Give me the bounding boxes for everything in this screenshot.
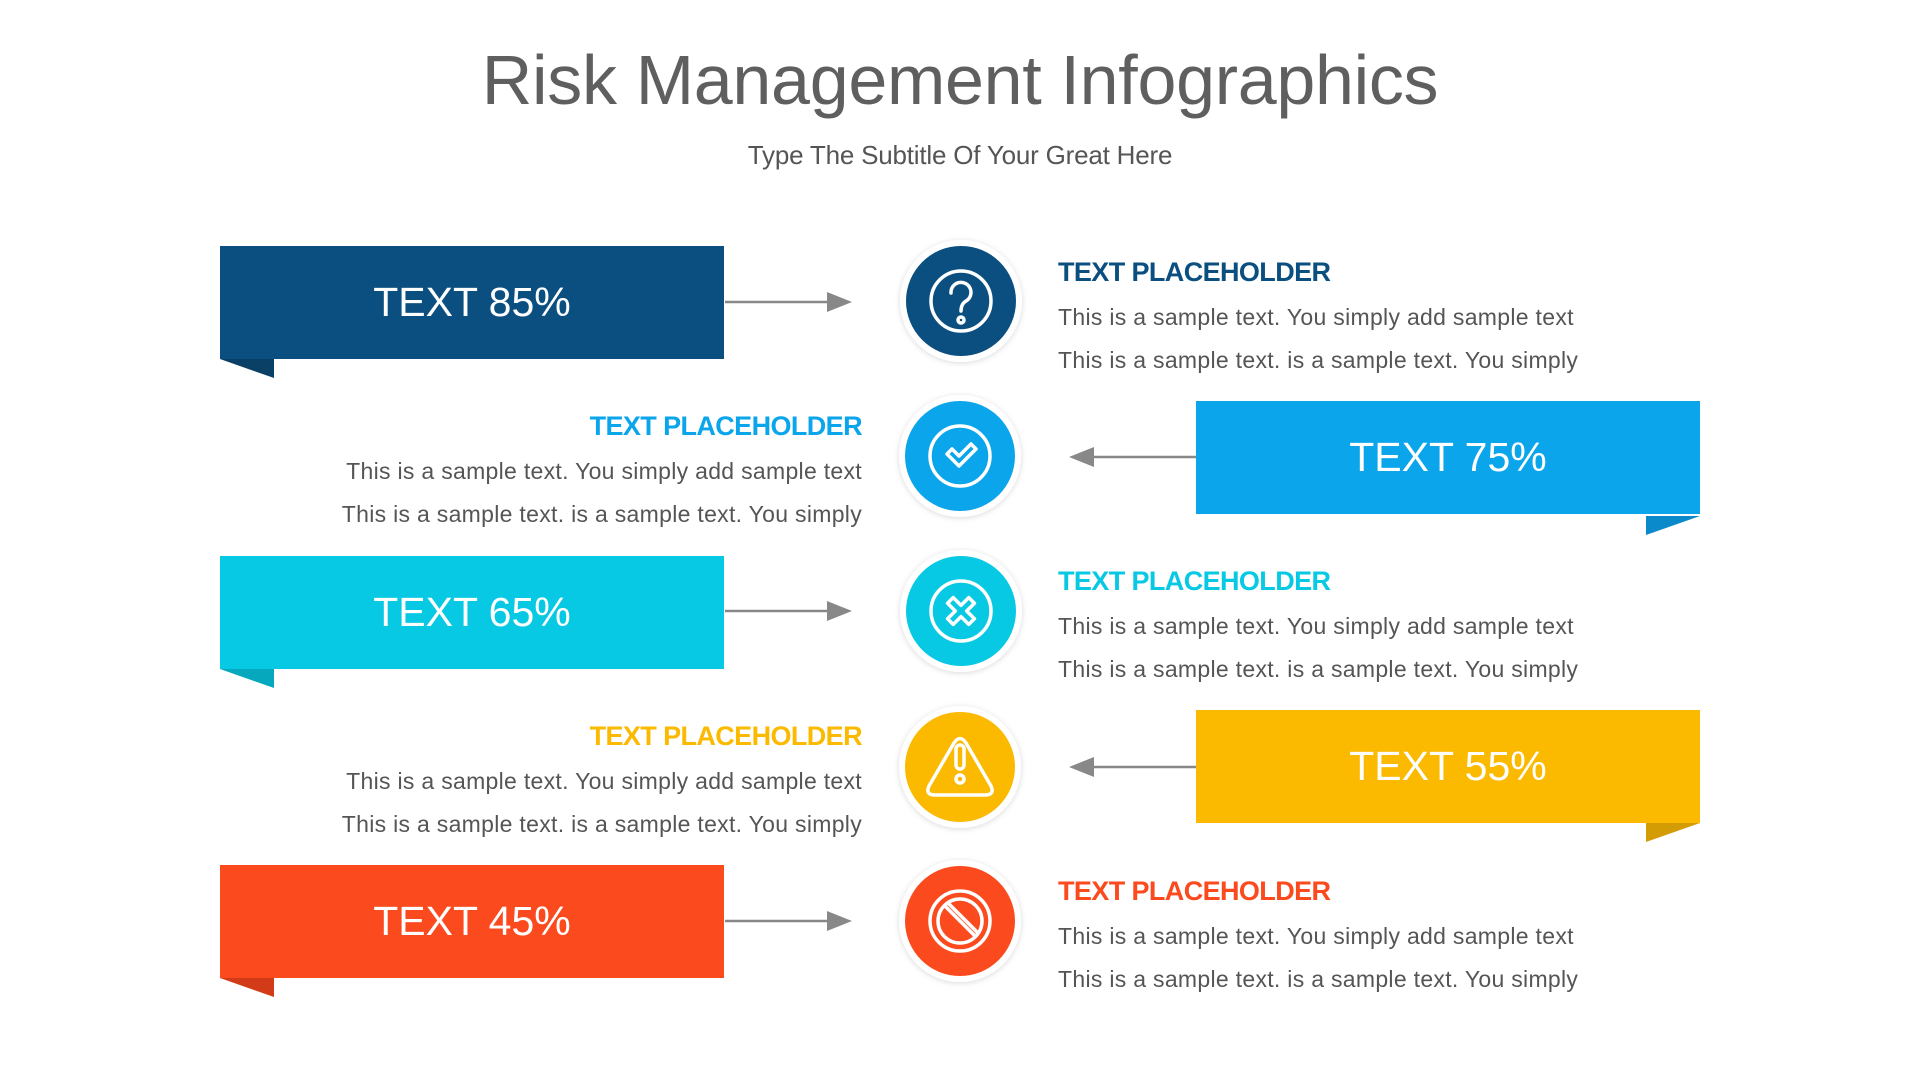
text block: row3: This is a sample text. You simply add sample text	[1058, 613, 1574, 639]
icon: question	[900, 240, 1022, 362]
banner: TEXT 65%: TEXT 65%	[373, 589, 571, 635]
banner: TEXT 55%: TEXT 55%	[1349, 743, 1547, 789]
banner: TEXT 85%: TEXT 85%	[373, 279, 571, 325]
fold: row3	[220, 669, 274, 688]
fold: row2	[1646, 516, 1700, 535]
fold: row5	[220, 978, 274, 997]
banner: TEXT 85%	[220, 246, 724, 359]
banner: TEXT 75%	[1196, 401, 1700, 514]
text block: row3: TEXT PLACEHOLDER	[1058, 566, 1330, 596]
subtitle: Type The Subtitle Of Your Great Here	[748, 140, 1172, 170]
text block: row3	[1058, 566, 1578, 682]
title: Risk Management Infographics	[482, 41, 1438, 119]
arrow: row2	[1069, 447, 1196, 467]
text block: row1: TEXT PLACEHOLDER	[1058, 257, 1330, 287]
text block: row4: TEXT PLACEHOLDER	[590, 721, 862, 751]
arrow: row4	[1069, 757, 1196, 777]
banner: TEXT 45%: TEXT 45%	[373, 898, 571, 944]
text block: row5: This is a sample text. is a sample text. You simply	[1058, 966, 1578, 992]
banner: TEXT 65%	[220, 556, 724, 669]
icon: check	[899, 395, 1021, 517]
text block: row4	[342, 721, 862, 837]
text block: row1: This is a sample text. is a sample text. You simply	[1058, 347, 1578, 373]
arrow: row3	[725, 601, 852, 621]
text block: row1: This is a sample text. You simply add sample text	[1058, 304, 1574, 330]
text block: row2: TEXT PLACEHOLDER	[590, 411, 862, 441]
text block: row4: This is a sample text. is a sample text. You simply	[342, 811, 862, 837]
text block: row2: This is a sample text. is a sample text. You simply	[342, 501, 862, 527]
icon: prohibited	[899, 860, 1021, 982]
text block: row4: This is a sample text. You simply add sample text	[346, 768, 862, 794]
icon: warning	[899, 706, 1021, 828]
banner: TEXT 45%	[220, 865, 724, 978]
text block: row5: This is a sample text. You simply add sample text	[1058, 923, 1574, 949]
text block: row5: TEXT PLACEHOLDER	[1058, 876, 1330, 906]
banner: TEXT 55%	[1196, 710, 1700, 823]
banner: TEXT 75%: TEXT 75%	[1349, 434, 1547, 480]
text block: row5	[1058, 876, 1578, 992]
text block: row2	[342, 411, 862, 527]
arrow: row1	[725, 292, 852, 312]
text block: row2: This is a sample text. You simply add sample text	[346, 458, 862, 484]
icon: cross	[900, 550, 1022, 672]
text block: row1	[1058, 257, 1578, 373]
fold: row1	[220, 359, 274, 378]
arrow: row5	[725, 911, 852, 931]
fold: row4	[1646, 823, 1700, 842]
text block: row3: This is a sample text. is a sample text. You simply	[1058, 656, 1578, 682]
